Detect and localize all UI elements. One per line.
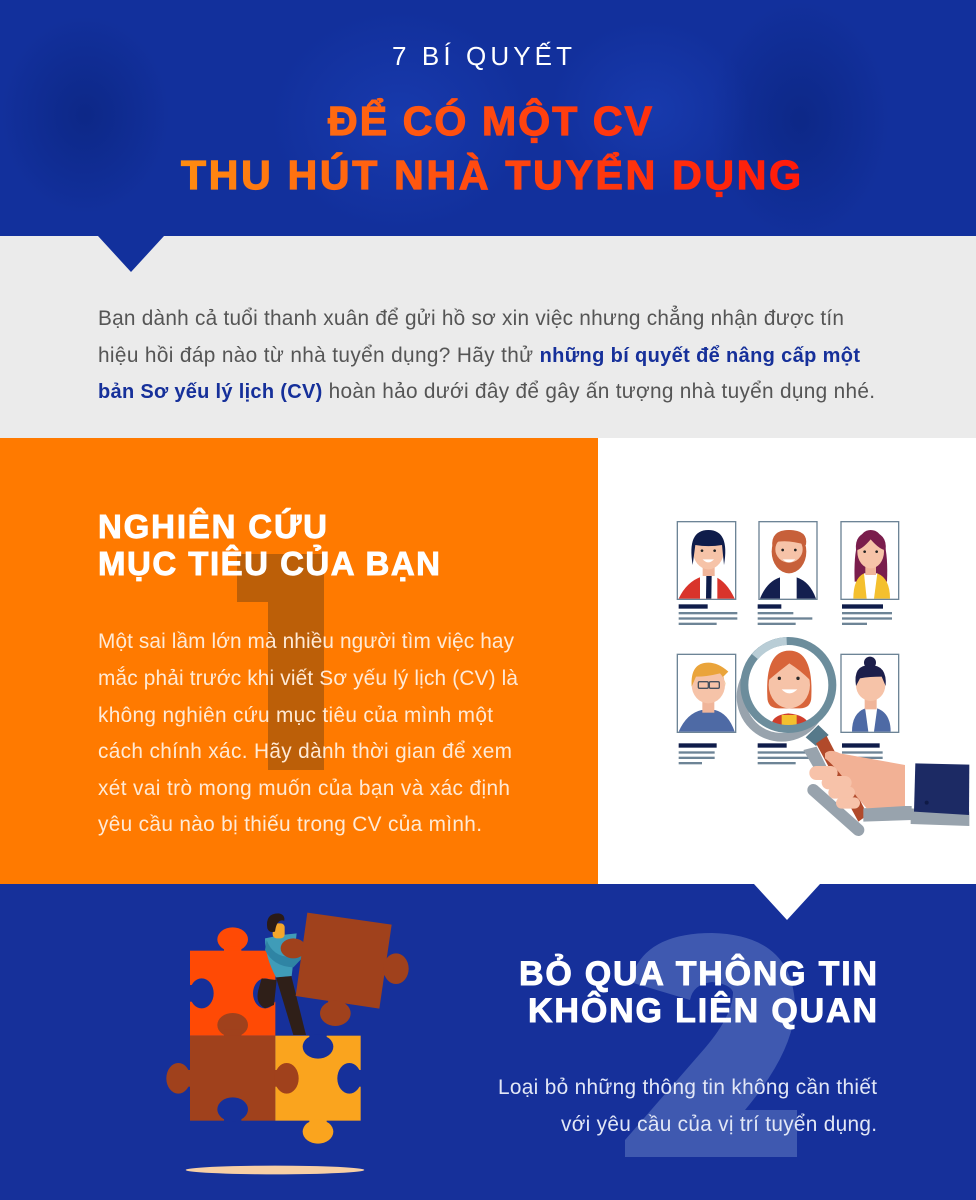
body text: step 2: Loại bỏ những thông tin không cần thiết <box>498 1076 877 1099</box>
puzzle piece: yellow <box>275 1035 361 1144</box>
body text: step 1: xét vai trò mong muốn của bạn và xác định <box>98 777 510 800</box>
magnifying glass <box>741 641 868 822</box>
puzzle piece: orange <box>189 927 277 1037</box>
heading: 7 bí quyết: 7 BÍ QUYẾT <box>392 41 572 71</box>
title: ĐỂ CÓ MỘT CV <box>328 97 653 144</box>
body text: step 2 <box>498 1076 877 1136</box>
body text: step 1 <box>98 630 518 836</box>
illustration: candidates and magnifying glass <box>677 522 969 830</box>
body text: step 1: mắc phải trước khi viết Sơ yếu lý lịch (CV) là <box>98 667 518 690</box>
heading: step 1: MỤC TIÊU CỦA BẠN <box>98 545 440 582</box>
intro text: Bạn dành cả tuổi thanh xuân để gửi hồ sơ xin việc nhưng chẳng nhận được tín <box>98 306 844 330</box>
body text: step 1: cách chính xác. Hãy dành thời gian để xem <box>98 740 512 763</box>
arrow: header pointer <box>98 236 164 272</box>
puzzle piece: floating <box>296 913 409 1026</box>
portrait: man with red jacket <box>677 522 736 599</box>
panel: introduction <box>0 236 976 438</box>
portrait: man with glasses <box>677 654 736 732</box>
panel: step 1 <box>0 438 976 884</box>
heading: step 2 <box>519 954 877 1030</box>
portrait: bearded man <box>759 522 817 599</box>
number 1 <box>237 554 324 770</box>
panel: header <box>0 0 976 240</box>
puzzle piece: brown <box>166 1036 275 1121</box>
hand and sleeve <box>809 751 969 830</box>
portrait: woman with yellow jacket <box>841 522 899 599</box>
caption lines <box>679 612 892 764</box>
arrow: step 2 pointer <box>754 884 820 920</box>
heading: step 2: BỎ QUA THÔNG TIN <box>519 954 877 993</box>
panel: step 2 <box>0 884 976 1200</box>
person carrying piece <box>257 913 307 1035</box>
heading: step 1 <box>98 508 440 582</box>
heading: step 2: KHÔNG LIÊN QUAN <box>528 991 877 1030</box>
intro text <box>98 306 875 403</box>
ground shadow <box>186 1166 364 1174</box>
illustration: puzzle and person <box>166 913 409 1174</box>
title: THU HÚT NHÀ TUYỂN DỤNG <box>181 151 801 198</box>
body text: step 1: không nghiên cứu mục tiêu của mình một <box>98 704 493 727</box>
body text: step 2: với yêu cầu của vị trí tuyển dụng. <box>561 1113 877 1136</box>
title <box>181 97 801 198</box>
body text: step 1: yêu cầu nào bị thiếu trong CV của mình. <box>98 813 482 836</box>
heading: step 1: NGHIÊN CỨU <box>98 508 327 545</box>
intro text: bản Sơ yếu lý lịch (CV) hoàn hảo dưới đây để gây ấn tượng nhà tuyển dụng nhé. <box>98 380 875 403</box>
body text: step 1: Một sai lầm lớn mà nhiều người tìm việc hay <box>98 630 515 653</box>
number 2 <box>625 933 797 1157</box>
intro text: hiệu hồi đáp nào từ nhà tuyển dụng? Hãy thử những bí quyết để nâng cấp một <box>98 344 860 367</box>
portrait: woman with bun <box>841 654 899 732</box>
